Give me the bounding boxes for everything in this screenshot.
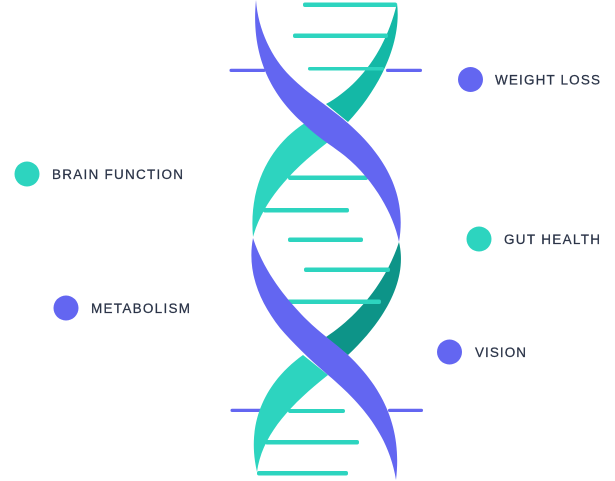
purple strand segments [251,0,401,480]
label: vision: VISION [475,345,526,360]
label: vision [437,340,526,364]
label: weight loss [458,67,600,92]
dark teal strand segments [326,3,401,355]
horizontal purple lines [230,69,423,412]
DNA helix [230,0,423,480]
label: brain function [14,162,183,186]
label: brain function: BRAIN FUNCTION [52,167,183,182]
teal rungs [257,2,397,476]
label: gut health [466,226,600,252]
label: weight loss: WEIGHT LOSS [495,72,600,88]
light teal strand segments [252,123,328,472]
label: metabolism: METABOLISM [91,301,190,316]
label: gut health: GUT HEALTH [504,232,600,247]
label: metabolism [54,296,190,320]
